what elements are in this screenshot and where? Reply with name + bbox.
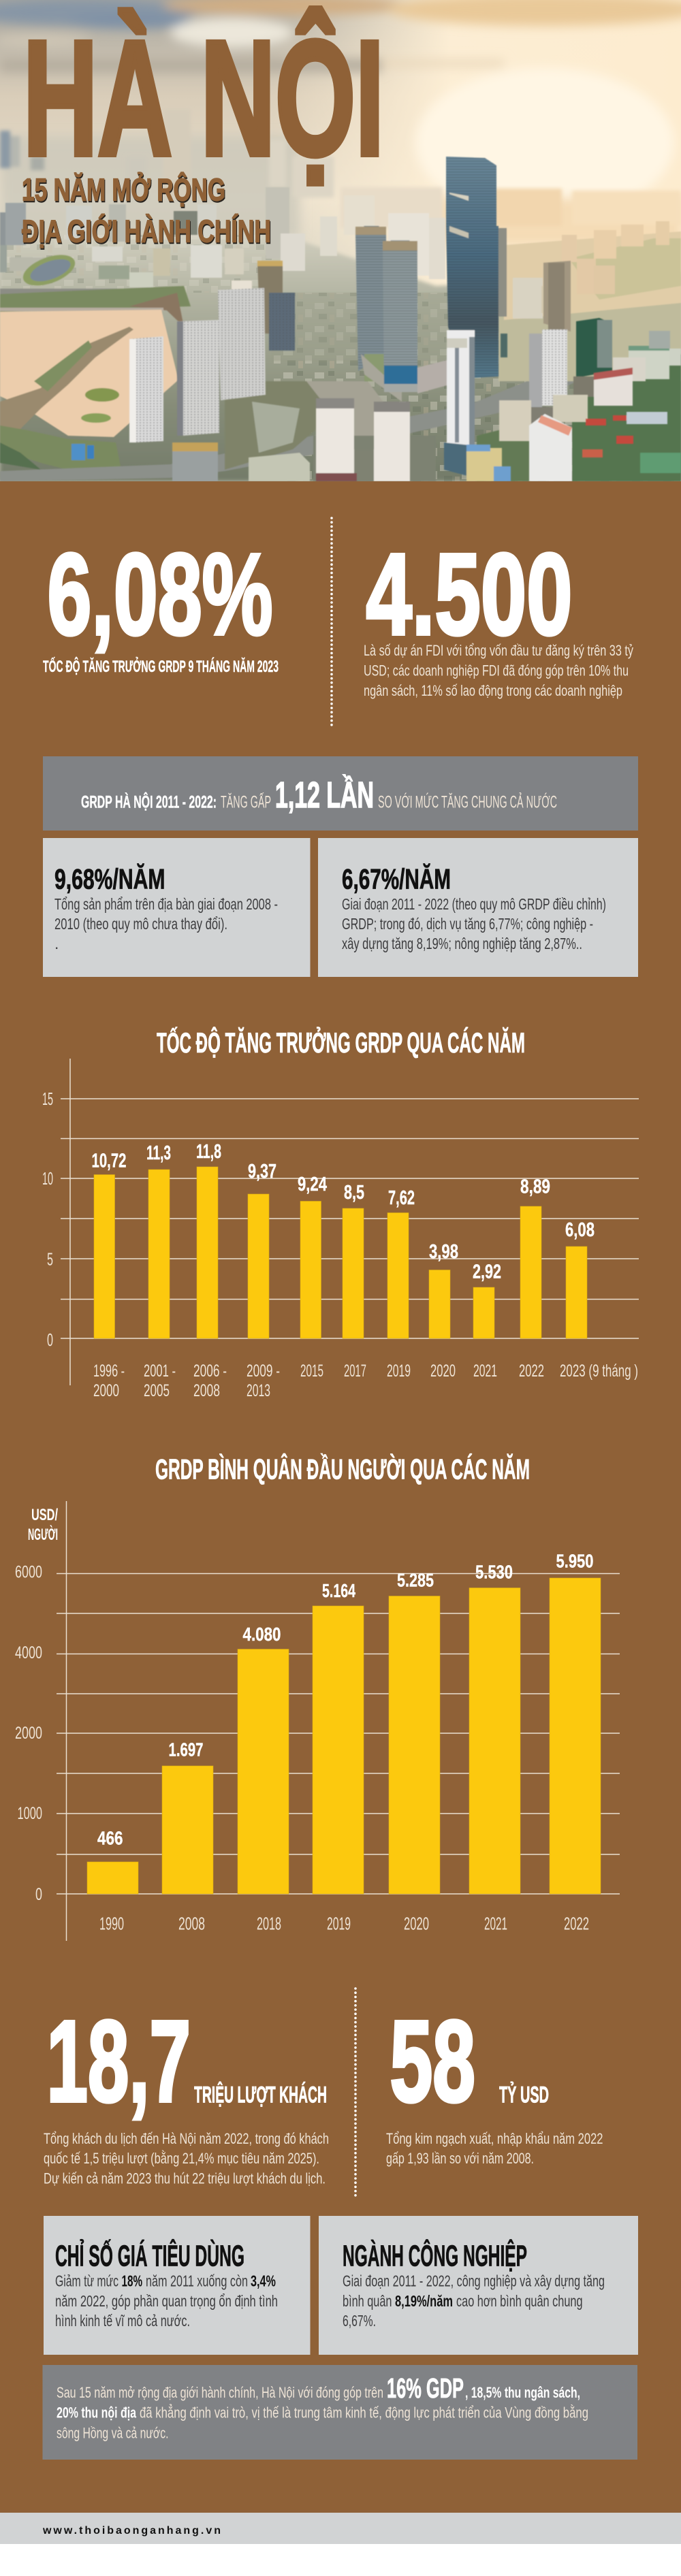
bar: 2006-2008: 2006 - [193,1362,227,1381]
bar: 2008: 1.697 [169,1739,203,1760]
hero photo: Hanoi skyline [0,0,681,481]
dotted divider [330,518,333,726]
banner: conclusion: 20% thu nội địa [57,2404,137,2421]
stat: 18,7 million visitors: Dự kiến cả năm 2023 thu hút 22 triệu lượt khách du lịch. [44,2170,326,2187]
banner: conclusion: Sau 15 năm mở rộng địa giới hành chính, Hà Nội với đóng góp trên [57,2384,383,2401]
panel: consumer price index: năm 2011 xuống còn [146,2272,248,2290]
bar: 2020: 3,98 [429,1241,458,1263]
bar: 2022 [550,1551,601,1933]
bar: 2023 nine months: 2023 (9 tháng ) [560,1362,638,1381]
bar: 2017 [343,1182,366,1381]
banner: conclusion [42,2365,637,2460]
bar: 2015: 9,24 [298,1174,327,1195]
y axis labels: 0 [47,1330,53,1350]
bar: 2019: 2019 [327,1913,351,1933]
bar: 2019: 5.164 [322,1580,355,1601]
stat: 18,7 million visitors: 18,7 [46,1997,191,2127]
bar: 2021: 2021 [484,1913,507,1933]
bar: 2019: 2019 [387,1362,411,1381]
bar: 2022: 2022 [564,1913,589,1933]
stat: GRDP growth 6,08%: 6,08% [48,530,272,659]
subtitle: ĐỊA GIỚI HÀNH CHÍNH [22,214,271,249]
bar: 2022: 8,89 [520,1176,550,1198]
panel: consumer price index: 18% [121,2272,142,2290]
y axis labels: 10 [42,1168,53,1189]
bar: 1996-2000: 2000 [93,1381,119,1400]
y axis unit [28,1506,58,1544]
banner: GRDP 1,12 times: GRDP HÀ NỘI 2011 - 2022: [81,791,217,811]
panel: industry sector: bình quân [343,2292,392,2310]
bar: 2020: 5.285 [397,1570,434,1590]
stat: 18,7 million visitors: quốc tế 1,5 triệu lượt (bằng 21,4% mục tiêu năm 2025). [44,2150,319,2167]
bar: 2009-2013: 2013 [247,1381,270,1400]
banner: conclusion: 16% GDP [387,2372,464,2404]
stat: 58 billion USD: TỶ USD [499,2082,549,2108]
bar: 2020: 2020 [430,1362,456,1381]
y axis labels: 15 [42,1089,53,1109]
panel: 9,68%/năm: . [54,935,59,952]
banner: conclusion: , 18,5% thu ngân sách, [465,2384,580,2401]
bar: 1996-2000: 1996 - [93,1362,125,1381]
bar: 2019 [387,1187,415,1381]
footer band with website: www.thoibaonganhang.vn [42,2525,221,2537]
panel: industry sector [319,2216,638,2355]
banner: conclusion: sông Hồng và cả nước. [57,2425,169,2441]
panel: industry sector: 8,19%/năm [395,2292,453,2310]
y axis labels: 2000 [15,1724,42,1743]
bar: 2009-2013: 9,37 [248,1161,276,1182]
panel: 6,67%/năm [318,838,638,977]
stat: 58 billion USD: Tổng kim ngạch xuất, nhập khẩu năm 2022 [386,2130,603,2147]
main title: HÀ NỘI [23,7,384,189]
subtitle: 15 NĂM MỞ RỘNG [22,172,225,207]
banner: GRDP 1,12 times: SO VỚI MỨC TĂNG CHUNG CẢ NƯỚC [378,791,557,811]
panel: 9,68%/năm: 2010 (theo quy mô chưa thay đổi). [54,915,227,933]
y axis labels: 4000 [15,1643,42,1662]
stat: 58 billion USD [386,1997,603,2167]
bar: 2001-2005 [144,1142,176,1400]
bar: 2023 nine months [560,1219,638,1381]
y axis labels: 5 [47,1249,53,1269]
stat: 58 billion USD: 58 [390,1997,475,2127]
subtitle [22,172,271,249]
stat: 18,7 million visitors [44,1997,329,2187]
bar: 2017: 8,5 [344,1182,364,1204]
banner: GRDP 1,12 times [43,756,638,831]
y axis labels: 1000 [18,1804,42,1823]
bar: 2001-2005: 2001 - [144,1362,176,1381]
stat: GRDP growth 6,08% [43,530,279,676]
y axis labels: 0 [35,1885,42,1904]
stat: 4.500 FDI projects: 4.500 [366,530,572,659]
bar: 2021 [473,1261,501,1381]
bar: 2021: 5.530 [475,1562,513,1582]
bar: 2020 [389,1570,440,1933]
bar: 2017: 2017 [344,1362,366,1381]
bar: 2020: 2020 [404,1913,429,1933]
bar: 2023 nine months: 6,08 [565,1219,595,1241]
bar: 2021: 2,92 [473,1261,501,1283]
y axis labels [42,1089,53,1350]
bar: 2008: 2008 [178,1913,205,1933]
dotted divider [354,1989,357,2197]
panel: 9,68%/năm: 9,68%/NĂM [54,863,165,895]
bar: 1990: 466 [97,1827,123,1849]
bar: 2021 [469,1562,520,1933]
panel: consumer price index: hình kinh tế vĩ mô cả nước. [55,2312,190,2330]
banner: GRDP 1,12 times: TĂNG GẤP [221,792,271,811]
bar: 1990 [87,1827,138,1933]
bar: 1996-2000 [91,1150,127,1400]
panel: 6,67%/năm: 6,67%/NĂM [342,863,451,895]
bar: 2006-2008: 11,8 [196,1141,221,1163]
panel: 6,67%/năm: xây dựng tăng 8,19%; nông nghiệp tăng 2,87%.. [342,935,582,952]
bar: 1996-2000: 10,72 [91,1150,127,1172]
panel: 9,68%/năm [43,838,311,977]
panel: industry sector: NGÀNH CÔNG NGHIỆP [343,2238,527,2272]
bar: 2001-2005: 2005 [144,1381,170,1400]
y axis unit: NGƯỜI [28,1525,58,1544]
panel: industry sector: 6,67%. [343,2312,376,2330]
stat: GRDP growth 6,08%: TỐC ĐỘ TĂNG TRƯỞNG GRDP 9 THÁNG NĂM 2023 [43,656,279,676]
bar: 2015 [298,1174,327,1381]
bar: 2001-2005: 11,3 [146,1142,171,1164]
bar: 2020 [429,1241,458,1381]
stat: 18,7 million visitors: Tổng khách du lịch đến Hà Nội năm 2022, trong đó khách [44,2130,329,2147]
y axis labels [15,1563,42,1904]
bar: 2019 [313,1580,364,1933]
bar: 2018 [238,1624,289,1933]
panel: consumer price index: năm 2022, góp phần quan trọng ổn định tình [55,2292,278,2310]
y axis unit: USD/ [31,1506,58,1524]
bar: 2009-2013: 2009 - [247,1362,280,1381]
bar: 2006-2008: 2008 [193,1381,220,1400]
bar: 2009-2013 [247,1161,280,1400]
footer band with website [0,2513,681,2544]
bar chart: GRDP growth by year [42,1059,639,1400]
stat: 18,7 million visitors: TRIỆU LƯỢT KHÁCH [194,2082,327,2108]
bar: 2022: 5.950 [556,1551,594,1571]
bar: 2022 [519,1176,550,1381]
bar chart: GRDP per capita by year [15,1501,620,1941]
panel: consumer price index: Giảm từ mức [55,2272,118,2290]
banner: GRDP 1,12 times: 1,12 LẦN [275,775,374,816]
panel: 9,68%/năm: Tổng sản phẩm trên địa bàn giai đoạn 2008 - [54,895,278,913]
panel: consumer price index: CHỈ SỐ GIÁ TIÊU DÙNG [55,2238,244,2272]
bar: 2022: 2022 [519,1362,544,1381]
panel: consumer price index [44,2216,311,2355]
bar: 1990: 1990 [99,1913,124,1933]
bar: 2021: 2021 [473,1362,497,1381]
panel: consumer price index: 3,4% [251,2272,276,2290]
panel: industry sector: cao hơn bình quân chung [456,2292,583,2310]
y axis labels: 6000 [15,1563,42,1582]
bar: 2006-2008 [193,1141,227,1400]
bar: 2018: 2018 [257,1913,281,1933]
bar: 2015: 2015 [300,1362,323,1381]
bar: 2008 [162,1739,213,1933]
stat: 58 billion USD: gấp 1,93 lần so với năm 2008. [386,2150,534,2167]
bar: 2019: 7,62 [388,1187,415,1209]
bar: 2018: 4.080 [242,1624,281,1645]
